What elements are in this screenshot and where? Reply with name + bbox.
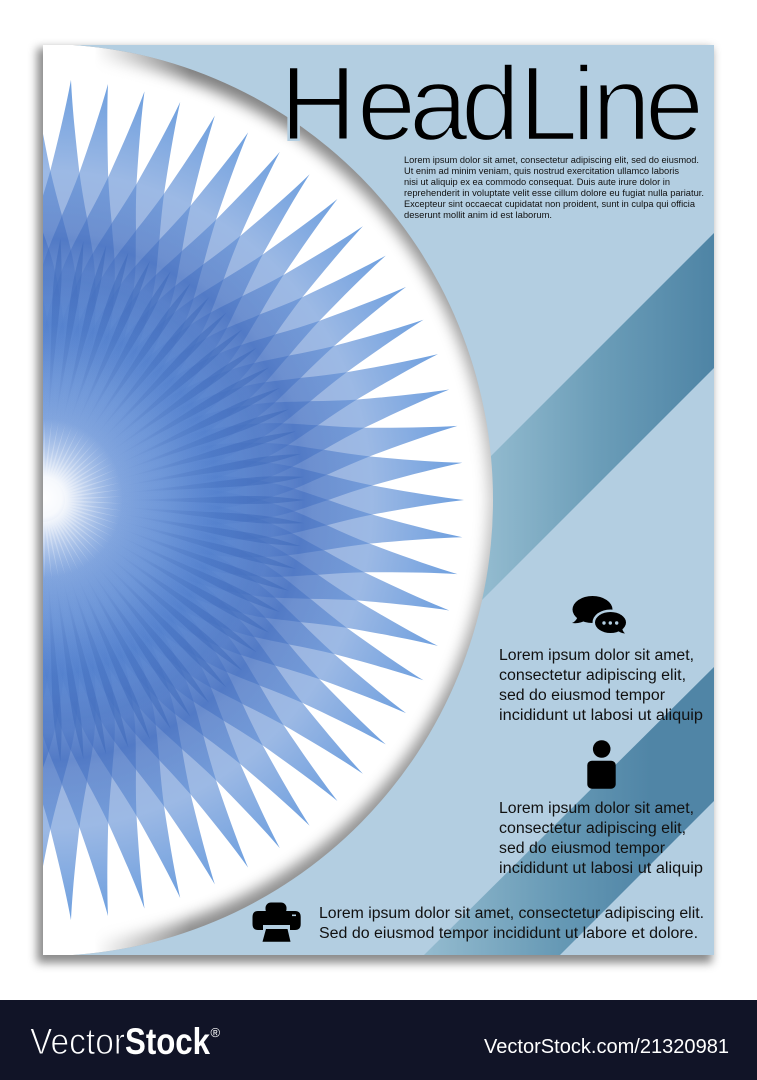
footer URL: VectorStock.com/21320981 <box>484 1036 729 1058</box>
text block: first feature: incididunt ut labosi ut aliquip <box>499 707 703 724</box>
footer logo <box>30 1021 220 1062</box>
intro paragraph: Ut enim ad minim veniam, quis nostrud exercitation ullamco laboris <box>404 166 679 177</box>
icon: chat bubbles <box>572 596 628 636</box>
sunburst petals <box>43 80 464 920</box>
footer logo: Stock <box>125 1021 210 1062</box>
lower diagonal stripe <box>424 667 714 955</box>
text block: second feature: incididunt ut labosi ut aliquip <box>499 860 703 877</box>
text block: bottom note <box>319 905 704 942</box>
text block: first feature <box>499 647 703 724</box>
intro paragraph: deserunt mollit anim id est laborum. <box>404 210 552 221</box>
upper diagonal stripe <box>482 233 714 600</box>
title: HeadLine <box>280 45 704 163</box>
text block: second feature: sed do eiusmod tempor <box>499 840 665 857</box>
intro paragraph <box>404 155 704 221</box>
sunburst dark slivers <box>33 238 305 762</box>
intro paragraph: reprehenderit in voluptate velit esse cillum dolore eu fugiat nulla pariatur. <box>404 188 704 199</box>
text block: bottom note: Sed do eiusmod tempor incididunt ut labore et dolore. <box>319 925 698 942</box>
sunburst base tone <box>43 243 300 757</box>
sunburst light rays <box>43 424 119 576</box>
centre glow <box>43 334 207 662</box>
intro paragraph: nisi ut aliquip ex ea commodo consequat. Duis aute irure dolor in <box>404 177 670 188</box>
poster panel <box>0 44 714 956</box>
footer logo: Vector <box>30 1021 125 1062</box>
footer bar <box>0 1000 757 1080</box>
white disc with inner shadow <box>0 44 493 956</box>
text block: first feature: Lorem ipsum dolor sit amet, <box>499 647 694 664</box>
intro paragraph: Excepteur sint occaecat cupidatat non proident, sunt in culpa qui officia <box>404 199 696 210</box>
text block: first feature: sed do eiusmod tempor <box>499 687 665 704</box>
text block: second feature: Lorem ipsum dolor sit amet, <box>499 800 694 817</box>
icon: person <box>587 740 616 789</box>
footer logo: ® <box>210 1025 220 1040</box>
page shadow <box>37 48 712 963</box>
intro paragraph: Lorem ipsum dolor sit amet, consectetur adipiscing elit, sed do eiusmod. <box>404 155 699 166</box>
icon: printer <box>252 902 301 942</box>
text block: second feature: consectetur adipiscing elit, <box>499 820 686 837</box>
text block: second feature <box>499 800 703 877</box>
text block: bottom note: Lorem ipsum dolor sit amet, consectetur adipiscing elit. <box>319 905 704 922</box>
text block: first feature: consectetur adipiscing elit, <box>499 667 686 684</box>
